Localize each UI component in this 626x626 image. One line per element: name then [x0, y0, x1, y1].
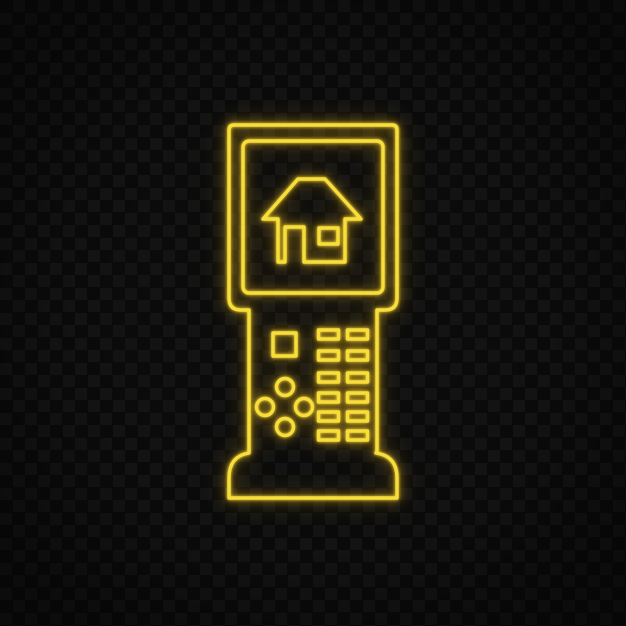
- neon line art: [229, 125, 397, 498]
- square button: [273, 333, 296, 356]
- screen frame: [243, 141, 383, 293]
- house outline: [263, 179, 361, 262]
- icon: house: [263, 179, 361, 262]
- four round buttons: [256, 378, 312, 436]
- keypad: [318, 330, 368, 440]
- kiosk body outline: [229, 125, 397, 498]
- house window: [319, 228, 338, 244]
